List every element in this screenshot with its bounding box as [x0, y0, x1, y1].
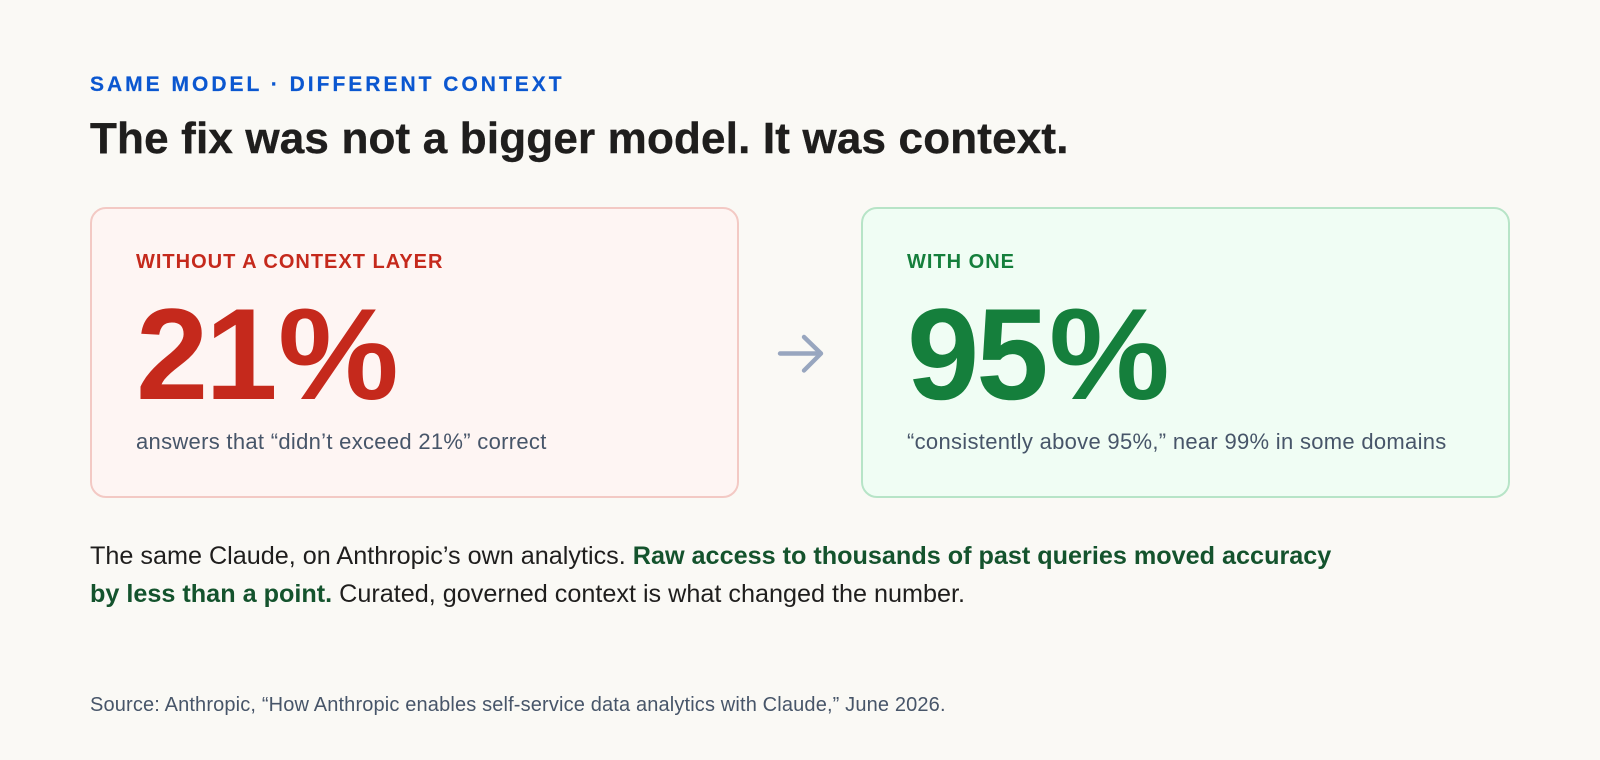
description: with one: “consistently above 95%,” near 99% in some domains: [907, 429, 1447, 454]
stat: 21%: %: [278, 281, 398, 427]
stat: 95%: %: [1049, 281, 1169, 427]
arrow: [778, 334, 824, 373]
title: The fix was not a bigger model. It was context.: [90, 114, 1069, 163]
description: without: answers that “didn’t exceed 21%” correct: [136, 429, 547, 454]
stat: 21%: 21: [136, 281, 275, 427]
source: Source: Anthropic, “How Anthropic enables self-service data analytics with Claude,” June 2026.: [90, 694, 946, 716]
stat: 21%: [136, 281, 398, 427]
stat: 95%: [907, 281, 1169, 427]
stat: 95%: 95: [907, 281, 1046, 427]
label: without: WITHOUT A CONTEXT LAYER: [136, 251, 443, 273]
eyebrow: SAME MODEL · DIFFERENT CONTEXT: [90, 73, 565, 96]
body text: by less than a point. Curated, governed context is what changed the number.: [90, 580, 965, 608]
body text: The same Claude, on Anthropic’s own analytics. Raw access to thousands of past queries moved accuracy: [90, 542, 1331, 570]
panel: without a context layer: [90, 207, 739, 498]
label: with one: WITH ONE: [907, 251, 1015, 273]
body text: [90, 542, 1332, 608]
panel: with one: [861, 207, 1510, 498]
